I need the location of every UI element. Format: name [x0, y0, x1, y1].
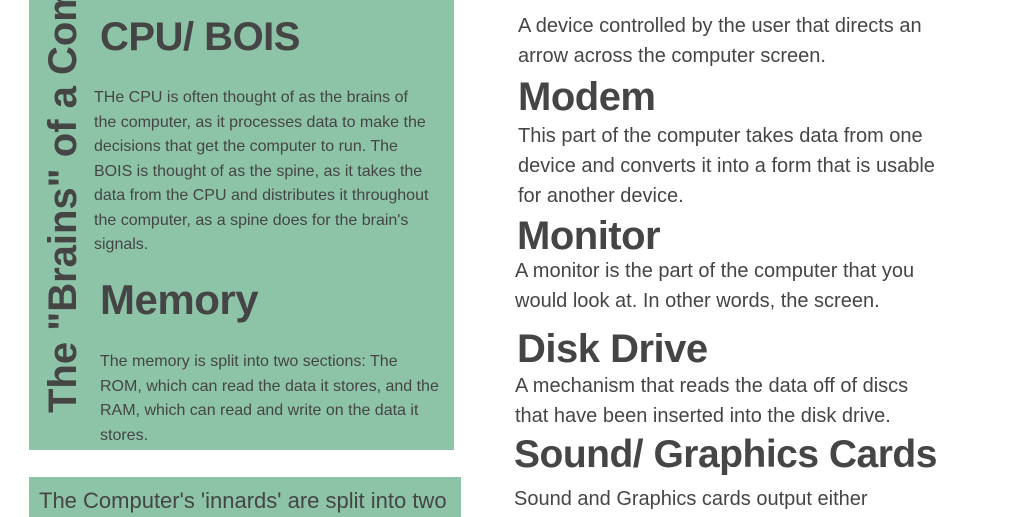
text: disk drive description: that have been inserted into the disk drive.: [515, 405, 891, 427]
text: modem description: This part of the computer takes data from one: [518, 125, 923, 147]
text: innards: The Computer's 'innards' are split into two: [39, 488, 447, 513]
text: mouse description: arrow across the computer screen.: [518, 45, 826, 67]
heading: Monitor: Monitor: [517, 214, 660, 258]
text: CPU description: decisions that get the computer to run. The: [94, 138, 398, 155]
text: memory description: The memory is split into two sections: The: [100, 353, 398, 370]
text: mouse description: A device controlled by the user that directs an: [518, 15, 922, 37]
text: CPU description: THe CPU is often thought of as the brains of: [94, 89, 408, 106]
heading: Disk Drive: Disk Drive: [517, 327, 708, 371]
text: disk drive description: A mechanism that reads the data off of discs: [515, 375, 908, 397]
text: modem description: device and converts it into a form that is usable: [518, 155, 935, 177]
text: memory description: stores.: [100, 426, 148, 444]
text: monitor description: [515, 260, 914, 312]
text: CPU description: [94, 89, 428, 253]
heading: CPU/BOIS: CPU/ BOIS: [100, 15, 300, 59]
text: mouse description: [518, 15, 922, 67]
text: modem description: for another device.: [518, 185, 684, 207]
panel: brains: [29, 0, 454, 450]
heading: Sound/Graphics Cards: Sound/ Graphics Cards: [514, 433, 937, 476]
text: memory description: RAM, which can read and write on the data it: [100, 402, 418, 419]
panel: innards: [29, 477, 461, 517]
text: memory description: ROM, which can read the data it stores, and the: [100, 378, 439, 394]
text: modem description: [518, 125, 935, 207]
text: sound description: Sound and Graphics cards output either: [514, 488, 868, 510]
heading: Memory: Memory: [100, 276, 258, 323]
text: memory description: [100, 353, 439, 444]
text: CPU description: the computer, as a spine does for the brain's: [94, 212, 408, 228]
text: monitor description: would look at. In other words, the screen.: [515, 290, 880, 312]
text: CPU description: signals.: [94, 236, 148, 253]
text: CPU description: the computer, as it processes data to make the: [94, 114, 426, 130]
text: disk drive description: [515, 375, 908, 427]
heading: Modem: Modem: [518, 75, 656, 119]
text: CPU description: BOIS is thought of as the spine, as it takes the: [94, 162, 422, 180]
text: CPU description: data from the CPU and distributes it throughout: [94, 187, 428, 204]
text: monitor description: A monitor is the part of the computer that you: [515, 260, 914, 282]
